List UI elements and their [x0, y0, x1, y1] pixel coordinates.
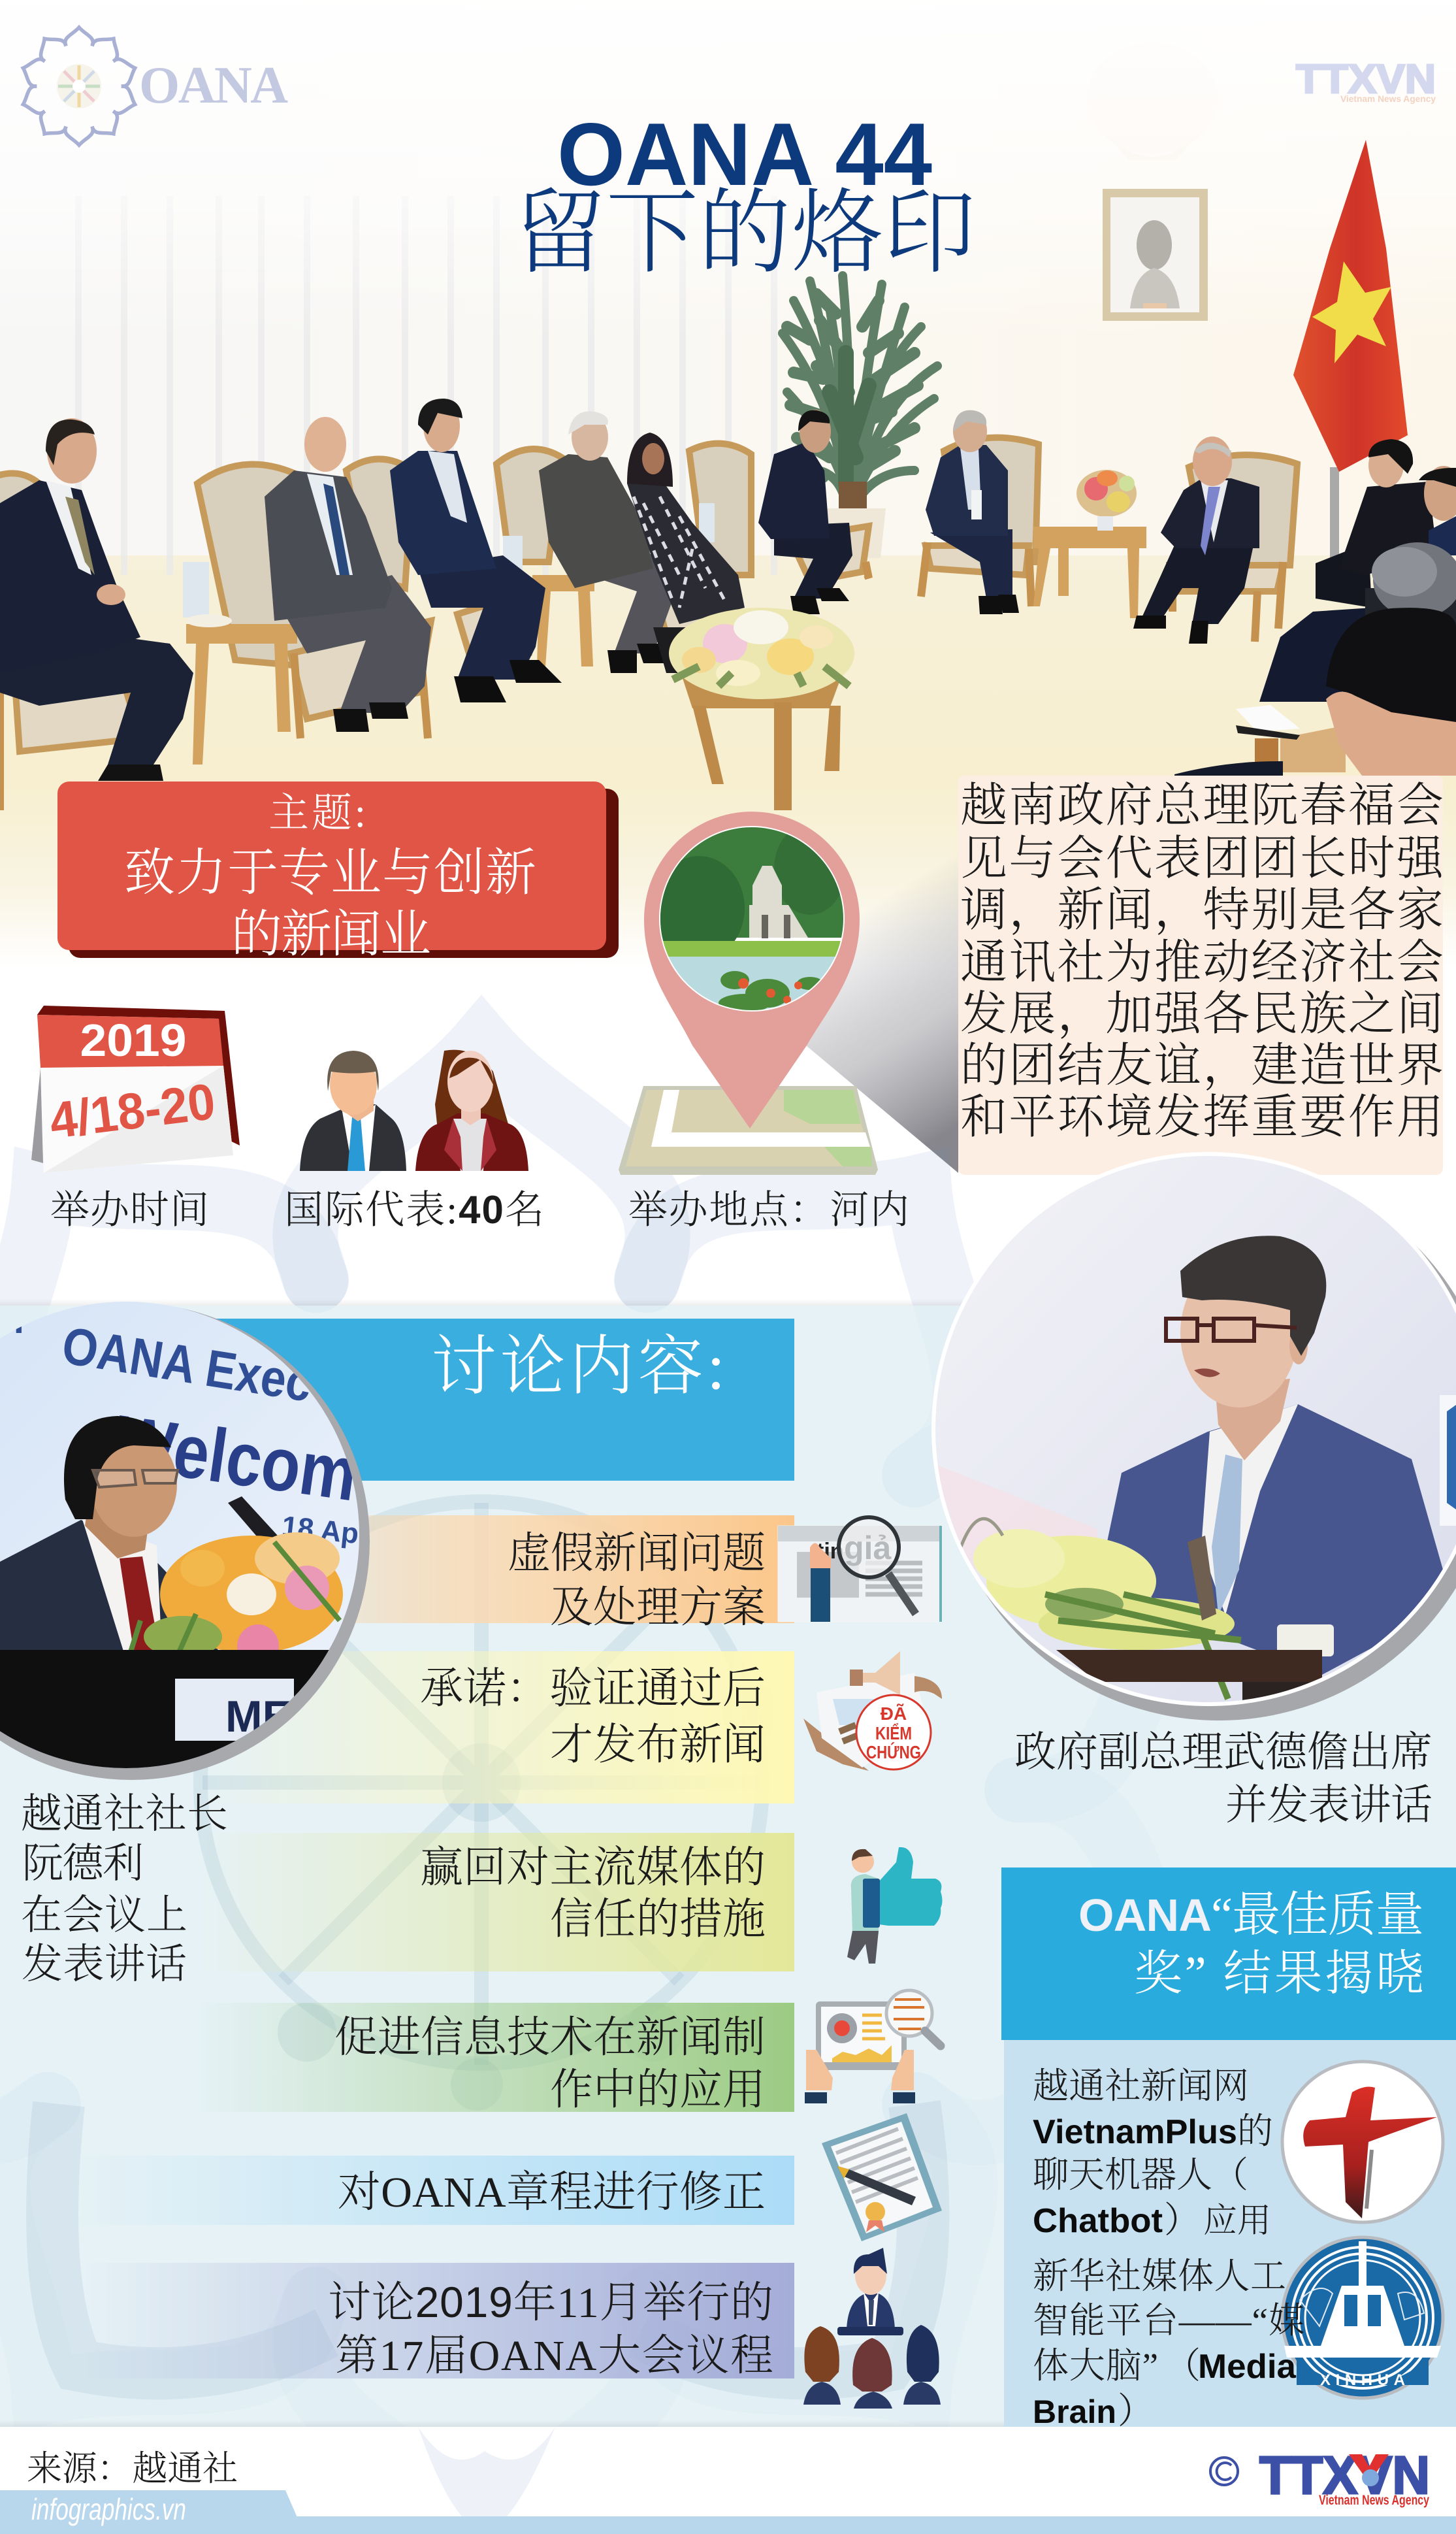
OANA logo: OANA [139, 57, 288, 114]
icon: speaker and audience [803, 2248, 941, 2409]
background meeting room photo [0, 0, 1456, 967]
person 1 [0, 418, 193, 781]
side tables [186, 527, 1146, 765]
callout: prime minister statement: 见与会代表团团长时强 [960, 832, 1444, 885]
bar: fake news [261, 1515, 794, 1632]
person 3 [390, 399, 562, 702]
icon: fake news magnifier [778, 1517, 942, 1622]
caption: left photo [21, 1791, 228, 1987]
label: date: 举办时间 [50, 1189, 209, 1232]
left circular photo: TTXVN director: Welcom [110, 1399, 363, 1517]
icon: delegates man and woman [300, 1050, 528, 1171]
bar: verification pledge [196, 1651, 794, 1803]
bar: charter amendment [65, 2156, 794, 2225]
logo: VietnamPlus [1282, 2062, 1443, 2222]
faint national emblem [1087, 42, 1218, 160]
title: 留下的烙印 [513, 182, 976, 285]
icon: document and pen [822, 2113, 942, 2241]
right circular photo: deputy prime minister [931, 1152, 1456, 1720]
bar: fake news: 及处理方案 [550, 1584, 766, 1632]
central table with flower bouquet [669, 608, 854, 810]
icon: fake news magnifier: tin [817, 1539, 844, 1564]
person 4 [539, 411, 679, 673]
icon: verified stamp: KIỂM [875, 1723, 912, 1743]
wheel watermark [201, 1502, 762, 2065]
bar: 17th congress agenda: 第17届OANA大会议程 [335, 2332, 773, 2380]
bar: information technology: 促进信息技术在新闻制 [334, 2014, 766, 2062]
caption: right photo: 政府副总理武德儋出席 [1014, 1729, 1432, 1775]
left circular photo: TTXVN director: 18 Ap [280, 1510, 361, 1550]
map [619, 1086, 878, 1175]
person 6 [758, 410, 852, 614]
award winners text: Chatbot [1033, 2202, 1163, 2240]
bar: fake news: 虚假新闻问题 [508, 1530, 766, 1577]
callout: prime minister statement: 越南政府总理阮春福会 [960, 780, 1444, 832]
callout: prime minister statement [958, 776, 1444, 1175]
left circular photo: TTXVN director [0, 1298, 372, 1780]
left circular photo: TTXVN director: ME [225, 1692, 292, 1741]
panel: discussion heading [216, 1319, 794, 1481]
TTXVN logo: TTXVN [1259, 2446, 1430, 2505]
award winners text: VietnamPlus [1033, 2113, 1237, 2151]
bar: charter amendment: 对OANA章程进行修正 [338, 2169, 766, 2216]
award heading: 奖” 结果揭晓 [1134, 1947, 1424, 2001]
logo: Xinhua: XINHUA [1320, 2371, 1405, 2389]
delegates on the right [1174, 439, 1456, 776]
caption: left photo: 发表讲话 [22, 1941, 187, 1987]
award winners text: Brain [1033, 2394, 1116, 2430]
person 2 [265, 417, 431, 732]
award winners text: 的 [1237, 2111, 1273, 2151]
caption: right photo [1014, 1729, 1432, 1828]
panel: discussion heading: 讨论内容: [431, 1330, 725, 1403]
left circular photo: TTXVN director: n [0, 1298, 24, 1341]
calendar icon: 2019 [80, 1015, 187, 1066]
source: 来源：越通社 [27, 2449, 238, 2488]
portrait frame [1103, 189, 1208, 321]
theme box [57, 782, 619, 963]
light blue content section [0, 1299, 1456, 2427]
icon: verified stamp [803, 1651, 942, 1771]
icon: fake news magnifier: giả [844, 1530, 892, 1566]
icon: thumbs up [847, 1847, 942, 1964]
logo: Xinhua [1282, 2237, 1443, 2398]
award winners text [1033, 2066, 1304, 2431]
caption: left photo: 越通社社长 [21, 1791, 228, 1837]
caption: right photo: 并发表讲话 [1225, 1782, 1432, 1828]
calendar icon [31, 1006, 240, 1173]
icon: verified stamp: ĐÃ [881, 1703, 907, 1724]
award winners text: ） [1118, 2391, 1154, 2431]
award winners text: 体大脑” [1033, 2346, 1158, 2386]
table bottles [183, 503, 715, 627]
location pin with Hanoi photo [644, 812, 860, 1128]
bar: 17th congress agenda: 讨论2019年11月举行的 [328, 2278, 773, 2327]
award winners text: 应用 [1203, 2203, 1271, 2240]
award winners text: ） [1164, 2200, 1200, 2240]
bar: information technology: 作中的应用 [550, 2066, 766, 2114]
callout: prime minister statement: 通讯社为推动经济社会 [960, 936, 1444, 989]
title: OANA 44 [557, 105, 932, 204]
title [513, 105, 976, 285]
bar: verification pledge: 才发布新闻 [550, 1721, 766, 1769]
lotus watermark [0, 1045, 1244, 2534]
bar: regain trust: 信任的措施 [550, 1896, 766, 1943]
theme box: 主题: [268, 791, 366, 836]
left circular photo: TTXVN director: OANA Exec [58, 1316, 316, 1413]
icon: tablet and hands [805, 1990, 941, 2103]
label: venue: 举办地点：河内 [628, 1189, 909, 1232]
TTXVN watermark logo: TTXVN [1296, 57, 1436, 102]
bar: information technology [196, 2003, 794, 2114]
vietnam flag [1293, 140, 1408, 559]
icon: verified stamp: CHỨNG [866, 1742, 921, 1762]
infographics.vn: infographics.vn [31, 2492, 186, 2526]
callout: prime minister statement: 的团结友谊，建造世界 [960, 1040, 1444, 1092]
bar: verification pledge: 承诺：验证通过后 [420, 1665, 766, 1713]
caption: left photo: 阮德利 [22, 1841, 144, 1886]
callout: prime minister statement: 和平环境发挥重要作用 [960, 1091, 1444, 1144]
award winners text: 聊天机器人（ [1033, 2155, 1248, 2195]
bar: regain trust [196, 1833, 794, 1971]
panel: best quality award [1001, 1868, 1456, 2431]
prime minister [1133, 436, 1259, 644]
label: delegates: 国际代表:40名 [284, 1188, 544, 1232]
gray shadow wedge behind callout [806, 804, 958, 1173]
award winners text: 新华社媒体人工 [1033, 2256, 1286, 2296]
caption: left photo: 在会议上 [21, 1892, 187, 1938]
bar: regain trust: 赢回对主流媒体的 [420, 1844, 766, 1892]
OANA logo [19, 27, 288, 145]
plant [783, 276, 937, 503]
chairs [0, 438, 1297, 666]
footer band [0, 2420, 1456, 2534]
TTXVN watermark logo: Vietnam News Agency [1340, 93, 1436, 104]
award heading: OANA“最佳质量 [1078, 1888, 1424, 1942]
award winners text: 越通社新闻网 [1033, 2066, 1249, 2106]
bar: 17th congress agenda [78, 2263, 794, 2380]
person 5 woman [627, 433, 745, 673]
callout: prime minister statement: 调，新闻，特别是各家 [960, 884, 1444, 936]
callout: prime minister statement: 发展，加强各民族之间 [960, 988, 1444, 1040]
small bouquet [1076, 470, 1137, 531]
theme box: 致力于专业与创新 [124, 844, 536, 901]
theme box: 的新闻业 [231, 906, 431, 963]
award winners text: Media [1198, 2348, 1297, 2386]
award winners text: （ [1165, 2346, 1201, 2386]
calendar icon: 4/18-20 [46, 1072, 218, 1149]
award heading [1078, 1888, 1424, 2001]
award winners text: 智能平台——“媒 [1033, 2301, 1304, 2341]
person 7 [926, 410, 1019, 614]
